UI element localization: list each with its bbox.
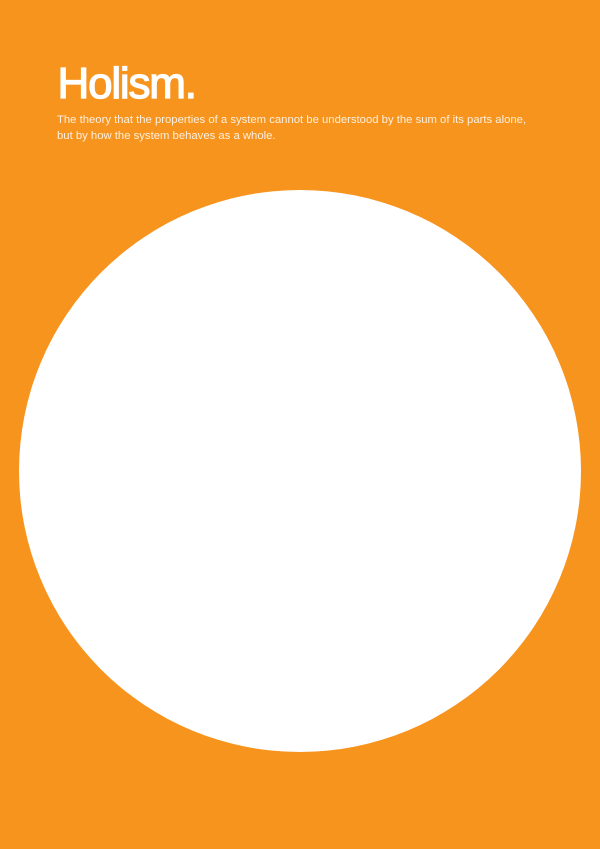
description text <box>57 114 526 142</box>
description text: The theory that the properties of a system cannot be understood by the sum of its parts alone, <box>57 114 526 126</box>
title: Holism. <box>58 59 196 108</box>
description text: but by how the system behaves as a whole. <box>57 130 276 142</box>
white circle <box>19 190 581 752</box>
